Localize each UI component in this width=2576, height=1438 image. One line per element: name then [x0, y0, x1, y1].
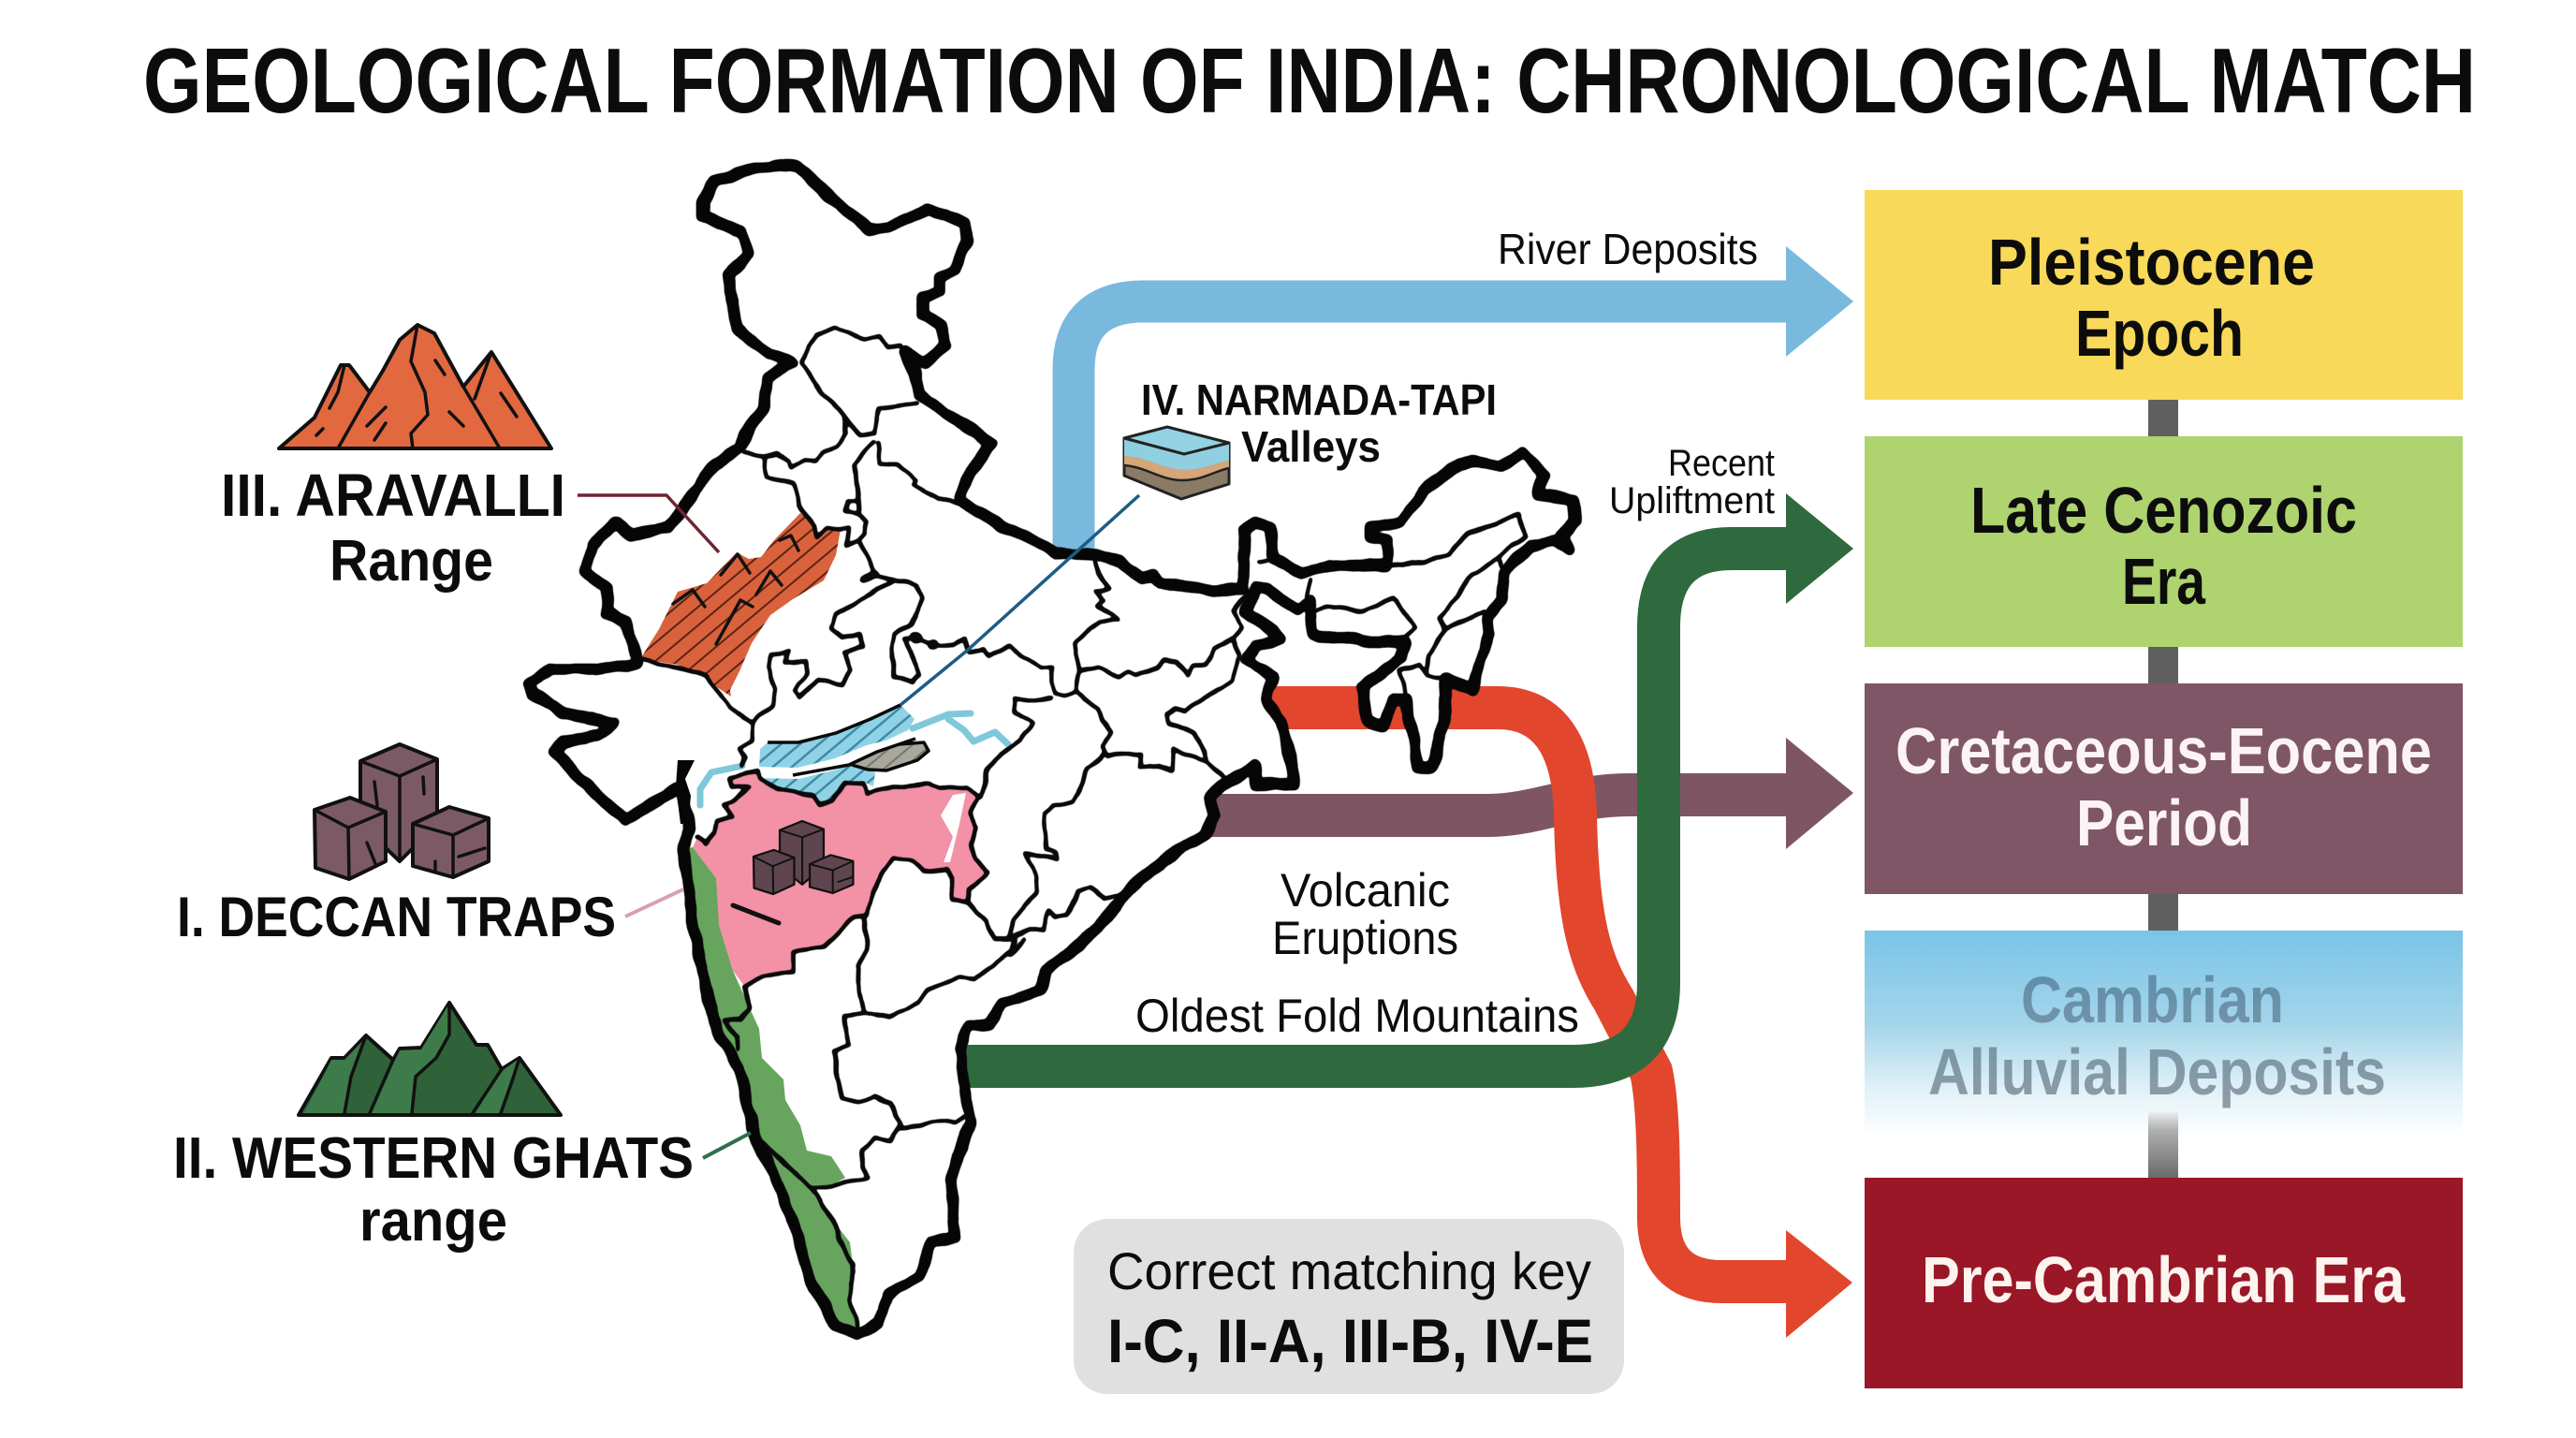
arrow label: volcanic eruptions: Eruptions [1272, 912, 1458, 964]
box: Pleistocene Epoch: Epoch [2075, 297, 2244, 370]
arrow label: recent upliftment: Recent [1668, 443, 1775, 484]
box: Cretaceous-Eocene Period [1865, 683, 2463, 894]
label: IV. Narmada-Tapi Valleys: Valleys [1241, 422, 1381, 471]
box: Pre-Cambrian Era: Pre-Cambrian Era [1922, 1243, 2406, 1316]
label: IV. Narmada-Tapi Valleys [1141, 375, 1497, 471]
label: II. Western Ghats range: range [359, 1189, 507, 1254]
arrow: volcanic eruptions to Cretaceous-Eocene [1189, 738, 1853, 849]
label: I. Deccan Traps: I. DECCAN TRAPS [177, 886, 616, 948]
box: Pleistocene Epoch: Pleistocene [1988, 226, 2315, 299]
region: Western Ghats [683, 847, 857, 1328]
box: Cambrian Alluvial Deposits: Alluvial Deposits [1928, 1035, 2386, 1108]
arrow label: volcanic eruptions [1272, 864, 1458, 964]
label: IV. Narmada-Tapi Valleys: IV. NARMADA-TAPI [1141, 375, 1497, 424]
callout: correct matching key [1074, 1219, 1624, 1394]
region: white gap in Deccan Traps [941, 793, 966, 862]
leader: Deccan Traps [625, 889, 683, 917]
box: Late Cenozoic Era [1865, 436, 2463, 647]
label: III. Aravalli Range: III. ARAVALLI [221, 462, 565, 529]
box: Pre-Cambrian Era [1865, 1178, 2463, 1388]
map: national outline [528, 166, 1575, 1334]
label: III. Aravalli Range [221, 462, 565, 594]
icon: sediment strata block [1124, 427, 1229, 499]
box: Cretaceous-Eocene Period: Period [2076, 786, 2252, 859]
mark: dash on Deccan region [733, 905, 779, 923]
label: III. Aravalli Range: Range [329, 529, 493, 594]
arrow label: recent upliftment [1609, 443, 1775, 521]
leader: Narmada-Tapi [900, 495, 1139, 705]
callout: correct matching key: Correct matching key [1107, 1241, 1591, 1300]
arrow: river deposits to Pleistocene [1074, 246, 1853, 558]
label: II. Western Ghats range: II. WESTERN GHATS [173, 1126, 694, 1191]
leader: Aravalli [578, 495, 719, 552]
timeline connector: fading link [2148, 1110, 2178, 1178]
icon: Western Ghats mountains [299, 1003, 561, 1115]
box: Late Cenozoic Era: Late Cenozoic [1970, 474, 2357, 547]
icon: basalt blocks on Deccan region [754, 821, 853, 894]
arrow label: river deposits: River Deposits [1498, 225, 1758, 273]
arrow: oldest fold mountains to Pre-Cambrian [1254, 708, 1852, 1338]
leader: Western Ghats [703, 1133, 751, 1158]
box: Late Cenozoic Era: Era [2122, 545, 2206, 618]
arrow label: oldest fold mountains: Oldest Fold Mountains [1135, 990, 1579, 1042]
map: state boundaries [640, 327, 1526, 1328]
box: Cretaceous-Eocene Period: Cretaceous-Eocene [1895, 714, 2432, 787]
callout: correct matching key: I-C, II-A, III-B, IV-E [1107, 1306, 1593, 1375]
region: Narmada-Tapi valleys [700, 705, 1008, 805]
arrow: recent upliftment to Late Cenozoic [955, 493, 1853, 1066]
timeline connector [2148, 400, 2178, 931]
map of India [528, 166, 1575, 1334]
map: land fill [528, 166, 1575, 1334]
box: Pleistocene Epoch [1865, 190, 2463, 400]
region: Aravalli range [640, 513, 841, 697]
map: coastal notch near Khambhat [676, 760, 695, 824]
icon: Aravalli mountains [279, 325, 551, 448]
label: II. Western Ghats range [173, 1126, 694, 1254]
region: Deccan Traps [693, 770, 988, 987]
arrow label: volcanic eruptions: Volcanic [1281, 864, 1450, 917]
box: Cambrian Alluvial Deposits [1865, 931, 2463, 1141]
icon: Deccan basalt blocks [315, 744, 489, 879]
arrow label: recent upliftment: Upliftment [1609, 480, 1775, 521]
box: Cambrian Alluvial Deposits: Cambrian [2021, 963, 2284, 1036]
